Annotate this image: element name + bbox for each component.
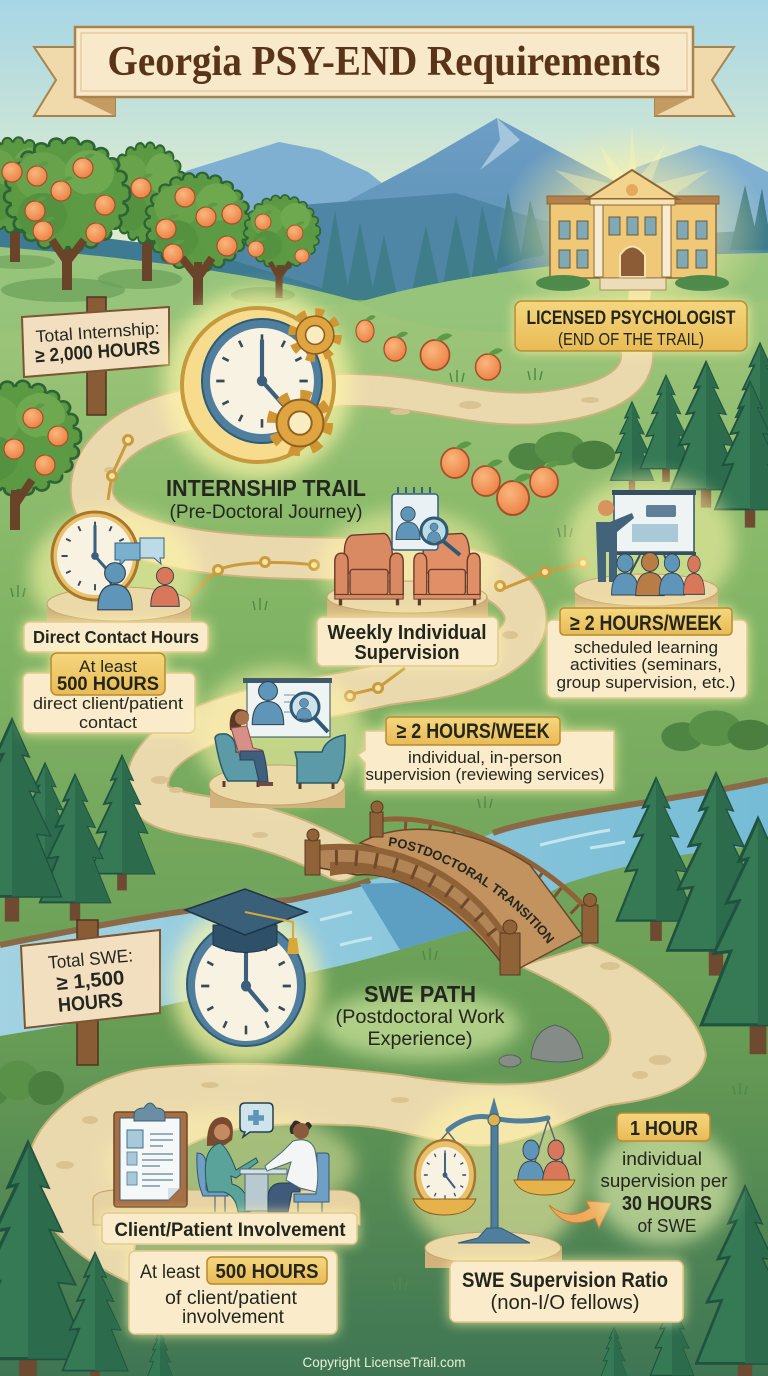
sign: total SWE: HOURS: [57, 989, 124, 1017]
trail stones: [56, 397, 671, 1169]
left pan: [413, 1199, 476, 1215]
label: direct contact hours: Direct Contact Hours: [33, 627, 199, 647]
milestone: client/patient involvement: [93, 1103, 360, 1225]
presenter: [596, 513, 634, 582]
sign post: [87, 297, 106, 415]
label: weekly individual supervision: [317, 617, 498, 666]
callout: at least 500 hours client involvement: [129, 1251, 337, 1334]
bushes: [0, 432, 768, 1106]
bridge: postdoctoral transition: [304, 800, 598, 976]
icon: SWE clock with graduation cap: [171, 889, 321, 1065]
scale column and beam: [491, 1115, 498, 1228]
label: weekly individual supervision: Weekly Individual: [328, 622, 486, 644]
banner main panel: [75, 27, 693, 97]
trail: upper section: [92, 290, 640, 860]
audience: [612, 554, 638, 595]
front rail: [315, 847, 503, 933]
callout: 1 hour per 30 hours: of SWE: [638, 1216, 696, 1236]
river: [0, 780, 768, 1036]
mountains: [0, 118, 768, 300]
peach tree: left: [0, 387, 74, 530]
blue armchairs: [215, 734, 262, 781]
sign: total internship: ≥ 2,000 HOURS: [35, 338, 161, 367]
building columns: [594, 205, 671, 277]
right pan chains: [530, 1120, 568, 1178]
building wings: [550, 203, 716, 278]
label: SWE supervision ratio: [450, 1261, 683, 1322]
pine cluster: middle right: [617, 774, 768, 1054]
sign: total SWE: ≥ 1,500: [56, 967, 125, 995]
milestone: supervision ratio scale: [405, 1090, 585, 1268]
callout: at least 500 hours client involvement: involvement: [182, 1307, 285, 1328]
bridge side panel: [315, 847, 503, 965]
callout: at least 500 hours client involvement: of client/patient: [165, 1288, 298, 1309]
milestone connectors: [108, 436, 588, 700]
icon: internship clock with gears: [164, 290, 352, 480]
bridge: postdoctoral transition: POSTDOCTORAL TRANSITION: [388, 837, 554, 944]
callout: 2 hours per week individual supervision: individual, in-person: [408, 748, 562, 767]
callout: at least 500 hours direct contact: direct client/patient: [33, 694, 183, 713]
sign board: [21, 930, 160, 1028]
label: SWE supervision ratio: SWE Supervision Ratio: [462, 1269, 668, 1292]
building steps and shrubs: [600, 278, 666, 290]
milestone: weekly individual supervision: [318, 487, 498, 620]
callout: 2 hours per week individual supervision: [358, 717, 614, 790]
pedestal: [93, 1190, 360, 1225]
pedestal: [210, 785, 345, 808]
back rail balusters: [380, 828, 583, 914]
callout: 1 hour per 30 hours: individual: [622, 1149, 702, 1169]
label: licensed psychologist: (END OF THE TRAIL): [558, 329, 704, 349]
callout: at least 500 hours client involvement: 500 HOURS: [216, 1261, 318, 1283]
trail: lower section: [27, 945, 706, 1285]
label: SWE supervision ratio: (non-I/O fellows): [490, 1292, 640, 1314]
speech bubble with plus: [240, 1103, 273, 1137]
label: direct contact hours: [24, 622, 208, 652]
title: Georgia PSY-END Requirements: [108, 39, 660, 85]
right pan: [514, 1180, 575, 1195]
speech bubbles: [115, 543, 140, 566]
people: [98, 563, 132, 610]
bridge label: [388, 846, 552, 950]
title banner: [34, 27, 734, 116]
callout: 2 hours per week scheduled learning: scheduled learning: [574, 638, 718, 657]
sign post: [77, 920, 98, 1065]
seated woman: [230, 709, 249, 732]
pine cluster: upper right: [610, 344, 768, 528]
sign: total SWE: [21, 920, 160, 1065]
peach orchard: [0, 142, 316, 305]
sign: total internship: Total Internship:: [35, 319, 160, 346]
bridge posts: [305, 801, 598, 975]
front rail balusters: [315, 857, 503, 943]
milestone: direct contact hours: [30, 510, 200, 640]
copyright: Copyright LicenseTrail.com: [302, 1354, 466, 1370]
doctor: [268, 1183, 300, 1212]
heading: internship trail: [166, 475, 366, 523]
back rail: [380, 819, 583, 905]
left pan chains: [432, 1132, 462, 1150]
sky: [0, 0, 768, 300]
callout: 2 hours per week individual supervision: ≥ 2 HOURS/WEEK: [396, 720, 550, 743]
table: [245, 1173, 268, 1211]
banner right ribbon tail: [655, 47, 734, 116]
licensed psychologist building with glow: [497, 125, 767, 335]
patient chair: [197, 1153, 228, 1212]
pine cluster: middle left: [0, 720, 154, 922]
building door: [620, 246, 645, 277]
callout: at least 500 hours direct contact: [23, 653, 195, 733]
armchairs: [335, 533, 403, 605]
pedestal: [575, 590, 718, 615]
heading: internship trail: (Pre-Doctoral Journey): [170, 502, 362, 523]
clock: [52, 512, 138, 600]
heading: SWE path: SWE PATH: [364, 981, 476, 1007]
callout: 1 hour per 30 hours: [594, 1113, 734, 1245]
background forest silhouette: [320, 185, 768, 300]
pine cluster: bottom left: [0, 1143, 173, 1376]
callout: 1 hour per 30 hours: supervision per: [600, 1171, 728, 1191]
heading: SWE path: [320, 981, 520, 1060]
heading: internship trail: INTERNSHIP TRAIL: [166, 475, 366, 501]
pedestal: [425, 1246, 562, 1268]
arrow to supervision ratio: [549, 1201, 611, 1228]
doctor chair: [294, 1153, 329, 1212]
heading: SWE path: (Postdoctoral Work: [336, 1007, 505, 1028]
people on right pan: [518, 1140, 544, 1185]
banner left ribbon tail: [34, 47, 115, 116]
callout: at least 500 hours direct contact: 500 HOURS: [57, 674, 159, 695]
callout: 2 hours per week scheduled learning: ≥ 2 HOURS/WEEK: [570, 612, 722, 635]
callout: 2 hours per week scheduled learning: group supervision, etc.): [556, 673, 736, 692]
sign board: [22, 307, 169, 377]
callout: 1 hour per 30 hours: 1 HOUR: [630, 1118, 698, 1140]
callout: at least 500 hours client involvement: At least: [140, 1262, 201, 1283]
label: licensed psychologist: [515, 301, 747, 351]
pedestal: [47, 604, 191, 630]
graduation cap: [213, 925, 277, 952]
milestone: individual in-person supervision: [195, 667, 365, 808]
label: client/patient involvement: Client/Patient Involvement: [114, 1220, 346, 1241]
pedestal: [327, 597, 488, 618]
review screen: [247, 680, 330, 737]
callout: 2 hours per week scheduled learning: activities (seminars,: [570, 655, 722, 674]
pine cluster: bottom right: [600, 1187, 768, 1376]
callout: 2 hours per week scheduled learning: [547, 608, 747, 698]
sign: total internship: [22, 297, 169, 415]
patient: [207, 1117, 233, 1146]
label: client/patient involvement: [102, 1213, 357, 1244]
bridge deck: [360, 829, 582, 968]
callout: at least 500 hours direct contact: contact: [79, 713, 137, 732]
grass tufts: [11, 368, 747, 1290]
callout: 1 hour per 30 hours: 30 HOURS: [622, 1193, 712, 1215]
label: weekly individual supervision: Supervision: [354, 642, 460, 664]
heading: SWE path: Experience): [368, 1029, 472, 1050]
callout: 2 hours per week individual supervision: supervision (reviewing services): [366, 765, 604, 784]
loose peaches: [356, 315, 561, 515]
sign: total SWE: Total SWE:: [47, 945, 134, 973]
callout: at least 500 hours direct contact: At least: [79, 657, 137, 676]
projector screen: [614, 494, 694, 552]
rocks: [499, 1025, 583, 1067]
notepad with magnifier: [392, 494, 438, 550]
building pediment: [587, 170, 678, 199]
milestone: scheduled learning activities: [565, 475, 735, 615]
clipboard: [114, 1112, 187, 1207]
building windows: [559, 217, 707, 268]
clock on left pan: [415, 1140, 475, 1210]
